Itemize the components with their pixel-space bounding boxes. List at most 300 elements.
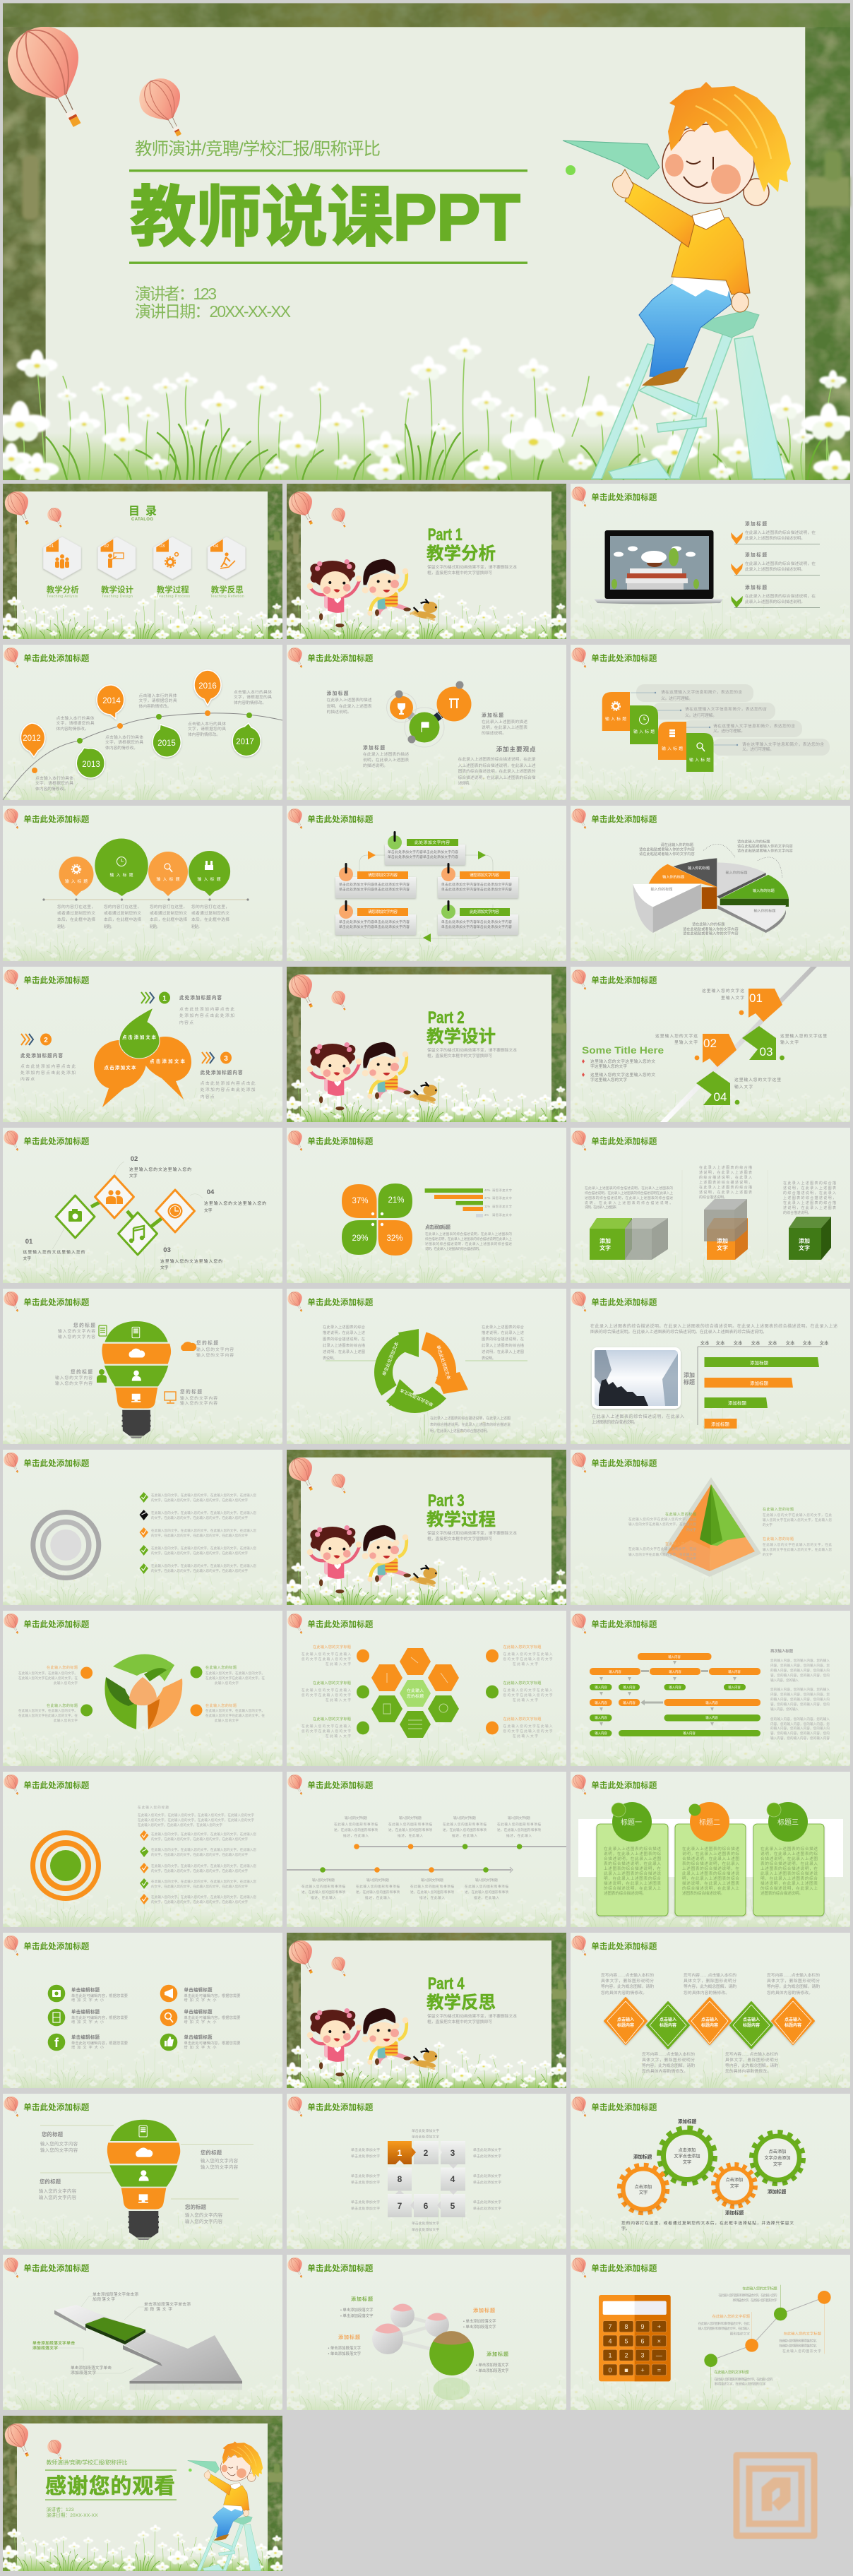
pill labels: 输入内容 bbox=[705, 1700, 718, 1705]
left labels: 的文字 bbox=[686, 1556, 696, 1561]
arrow 01 bbox=[748, 989, 782, 1022]
note 1 bbox=[141, 991, 234, 1025]
notes: 输入文字 bbox=[780, 1039, 799, 1045]
item: third point: 在此录入上述图表的综合描述说明，在 bbox=[745, 593, 816, 599]
pill labels: 输入内容 bbox=[683, 1731, 696, 1736]
text upper right: 输入您的文字内容 bbox=[201, 2157, 239, 2164]
right labels: 在此输入您的文字标题 bbox=[503, 1680, 541, 1686]
side icons bbox=[357, 1650, 499, 1734]
right labels: 在此输入您的文字在此输入 bbox=[503, 1652, 553, 1657]
left labels: 在此输入您的文字在此输入 bbox=[302, 1688, 351, 1693]
icon: calculator: 3 bbox=[640, 2352, 644, 2359]
text block middle: 述说明，在此录入上述图表 bbox=[699, 1170, 752, 1175]
axis labels: 文本 bbox=[820, 1340, 829, 1346]
captions: 粘贴。 bbox=[104, 924, 114, 929]
faded meadow bbox=[0, 914, 285, 962]
left labels: 在此输入文字 bbox=[326, 1698, 351, 1703]
left labels: 在此输入您的文字。在此输入您的文字。 bbox=[18, 1671, 78, 1676]
left labels: 输入您的文字在此输入您的文字，在此输入您 bbox=[628, 1522, 696, 1527]
pill text: 请在这里输入文字信息和简介，表达您的含 bbox=[685, 706, 767, 712]
connectors bbox=[359, 855, 493, 938]
background bbox=[287, 1611, 566, 1766]
puzzle tiles bbox=[388, 2141, 465, 2217]
lower timeline bbox=[287, 1867, 513, 1873]
note 3: 处添加内容点击此处添加 bbox=[201, 1087, 256, 1092]
puzzle tiles: 1 bbox=[398, 2148, 402, 2158]
tile notes: 单击此处添加文字 bbox=[473, 2206, 501, 2211]
text: right: 在此录入上述图表的描述 bbox=[482, 719, 527, 724]
right labels: 在此输入您的文字在此输入您的文字。在 bbox=[205, 1676, 265, 1681]
axis title bbox=[684, 1371, 695, 1385]
axis labels: 文本 bbox=[786, 1340, 795, 1346]
box dark green bbox=[789, 1217, 831, 1260]
heading: 单击此处添加标题 bbox=[591, 1297, 657, 1307]
text block left: 说明，在此录入上述图表的综合描述说明。 bbox=[585, 1200, 673, 1205]
panel: Part 1 section slide bbox=[282, 484, 568, 640]
card one: 明，在此录入上述图表的综合 bbox=[604, 1876, 661, 1881]
label 03: 这里输入您的文这里输入您的 bbox=[160, 1258, 222, 1264]
icon: big balloon bbox=[1, 2419, 38, 2462]
captions: 您的内容打在这里， bbox=[191, 904, 229, 910]
illustration: kids bbox=[307, 2008, 437, 2076]
faded meadow bbox=[282, 1880, 568, 1928]
text: upper left: 的描述说明。 bbox=[326, 709, 352, 715]
chart note: 说明，在此录入上述图表的综合描述说明。 bbox=[425, 1246, 482, 1251]
right text: 输入内容，您的输入 bbox=[770, 1707, 799, 1712]
petal 37% bbox=[342, 1184, 377, 1218]
background bbox=[3, 1128, 282, 1283]
left labels: 在此输入您的文字。在此输入您的文字。 bbox=[18, 1708, 78, 1713]
faded meadow bbox=[566, 2202, 852, 2250]
chart: 3d pie: 请在此粘贴或者输入你的文字内容 bbox=[737, 847, 793, 853]
icon: balloon bbox=[1, 1611, 24, 1637]
diagonal band bbox=[660, 967, 817, 1122]
faded meadow bbox=[0, 2202, 285, 2250]
heading: 单击此处添加标题 bbox=[591, 1619, 657, 1629]
item: analysis: 01 bbox=[49, 544, 54, 549]
card low right: 单击此处添加文字内容 bbox=[441, 924, 477, 929]
text blocks: 体内容酌情修改。 bbox=[35, 786, 68, 792]
illustration: kids bbox=[307, 1525, 437, 1593]
diamond labels: 标题内容 bbox=[743, 2022, 760, 2028]
text block left: 说明，在此录入上述图表 bbox=[585, 1205, 616, 1210]
flow arrows bbox=[600, 1661, 736, 1726]
icon: small balloon bbox=[329, 989, 351, 1013]
faded meadow bbox=[282, 1397, 568, 1445]
chart: growth line: 在此输入您的图形和事项描述文字，在此输入您的 bbox=[714, 2377, 773, 2382]
right text: 内容，您的输入内容，您的输入内容，您 bbox=[770, 1692, 830, 1697]
diamond labels: 标题内容 bbox=[701, 2022, 718, 2028]
chart: 3d pie: 输入你的标题 bbox=[688, 865, 710, 871]
text: lower right bbox=[180, 1388, 217, 1406]
upper captions: 在此输入您的图形和事项描 bbox=[443, 1822, 487, 1827]
background bbox=[571, 1611, 850, 1766]
photo caption: 上述图表的综合描述说明。 bbox=[592, 1419, 638, 1425]
card one bbox=[597, 1802, 668, 1916]
background bbox=[571, 2094, 850, 2249]
forest frame background bbox=[3, 3, 850, 480]
sub heading: CATALOG bbox=[131, 518, 153, 522]
pill labels: 输入内容 bbox=[595, 1731, 607, 1736]
panel: calculator slide bbox=[566, 2255, 852, 2411]
icon: balloon bbox=[569, 1933, 592, 1959]
arrow 04: 04 bbox=[714, 1090, 727, 1104]
label 02: 这里输入您的文这里输入您的 bbox=[129, 1167, 191, 1172]
tile notes: 单击此处添加文字 bbox=[412, 2134, 439, 2140]
tab 1 bbox=[602, 692, 630, 731]
bubble 2017: 2017 bbox=[236, 738, 254, 746]
icon: balloon bbox=[1, 1128, 24, 1154]
background bbox=[571, 1450, 850, 1605]
bubble 3: 输入标题 bbox=[157, 876, 180, 882]
box labels: 文字 bbox=[717, 1244, 728, 1251]
bubble 2015: 2015 bbox=[157, 739, 176, 748]
text blocks: 点击输入本行的具体 bbox=[105, 734, 143, 740]
heading: 单击此处添加标题 bbox=[307, 653, 374, 663]
divider lines bbox=[682, 1170, 768, 1262]
frame bbox=[287, 967, 566, 1122]
photo: business team bbox=[592, 1347, 681, 1409]
panel: laptop slide bbox=[566, 484, 852, 640]
leader lines bbox=[52, 1162, 203, 1258]
card top: 单击此处添加文字内容 bbox=[423, 849, 458, 854]
text: lower left bbox=[55, 1368, 93, 1386]
background bbox=[571, 1772, 850, 1927]
background bbox=[571, 1289, 850, 1444]
faded meadow bbox=[566, 1558, 852, 1606]
text: upper right: 输入您的文字内容 bbox=[196, 1352, 234, 1358]
chart: curve line bbox=[3, 713, 282, 800]
text lower right: 输入您的文字内容 bbox=[185, 2212, 223, 2218]
background bbox=[3, 967, 282, 1122]
card low right: 单击此处添加文字内容 bbox=[477, 919, 512, 924]
background bbox=[571, 484, 850, 639]
item: third point: 添加标题 bbox=[745, 584, 767, 590]
icon: balloon bbox=[285, 2094, 308, 2120]
tab 2 bbox=[630, 705, 658, 744]
axis labels bbox=[700, 1340, 829, 1346]
honeycomb bbox=[371, 1648, 459, 1738]
text left: 表说明。 bbox=[323, 1355, 337, 1361]
bar 2: 添加标题 bbox=[750, 1380, 768, 1386]
pill text: 请在这里输入文字信息和简介，表达您的含 bbox=[742, 741, 824, 747]
card one: 在此录入上述图表的综合描述 bbox=[604, 1846, 661, 1852]
tile notes: 单击此处添加文字 bbox=[473, 2200, 501, 2205]
captions: 或者通过复制您的文 bbox=[57, 910, 95, 916]
card low left bbox=[335, 900, 416, 935]
card mid right: 单击此处添加文字内容 bbox=[441, 882, 477, 887]
left labels bbox=[628, 1512, 696, 1561]
faded meadow bbox=[566, 2363, 852, 2411]
left labels: 您的文字在此输入您的文字 bbox=[302, 1657, 351, 1662]
icon: big balloon bbox=[285, 970, 322, 1013]
chart: 3d pie bbox=[633, 838, 793, 936]
text: lower left: 说明，在此录入上述图表 bbox=[363, 757, 409, 763]
left labels: 此输入您的文字 bbox=[54, 1681, 78, 1686]
card one: 描述说明，在此录入上述图表 bbox=[604, 1880, 661, 1886]
captions: 本后，在此框中选择 bbox=[57, 917, 95, 922]
left labels: 在此输入文字 bbox=[326, 1662, 351, 1666]
note 2: 单击添加段落文字单击添 bbox=[144, 2301, 191, 2307]
list text: 的文字。在此输入您的文字。在此输入您的文字。在此输入您的文字 bbox=[151, 1868, 248, 1873]
note 2 bbox=[20, 1034, 76, 1082]
heading: 单击此处添加标题 bbox=[591, 1136, 657, 1146]
label 01: 这里输入您的文这里输入您的 bbox=[23, 1249, 85, 1255]
gear orange two: 点击添加 bbox=[726, 2177, 743, 2183]
chart: cycle arrows: 单击此处添加文本 bbox=[381, 1340, 400, 1376]
text blocks: 体内容酌情修改。 bbox=[188, 732, 220, 737]
pill labels: 输入内容 bbox=[728, 1685, 741, 1690]
gear orange two bbox=[713, 2165, 756, 2206]
text blocks: 点击输入本行的具体 bbox=[56, 715, 95, 721]
text block right: 上述图表的综合描述说明， bbox=[783, 1195, 836, 1200]
background bbox=[3, 1611, 282, 1766]
item: second point bbox=[731, 551, 820, 576]
card one: 合描述说明，在此录入上述图 bbox=[604, 1856, 661, 1861]
presenter: 演讲者：123 bbox=[47, 2506, 74, 2512]
frame bbox=[3, 484, 282, 639]
note 4 bbox=[71, 2365, 112, 2375]
faded meadow bbox=[566, 1236, 852, 1284]
icon: large hot air balloon bbox=[0, 14, 109, 142]
puzzle tiles: 5 bbox=[451, 2201, 455, 2211]
sub heading: Some Title Here bbox=[582, 1044, 664, 1056]
text: upper left: 输入您的文字内容 bbox=[58, 1328, 95, 1334]
faded meadow bbox=[0, 1397, 285, 1445]
background bbox=[3, 1772, 282, 1927]
title orange 1: 添加标题 bbox=[473, 2307, 495, 2313]
chart: 3d pie: 请在此输入你的标题 bbox=[737, 838, 770, 844]
text block middle bbox=[699, 1165, 752, 1200]
petal 21% bbox=[378, 1183, 412, 1218]
text blocks: 文字，请根据您的具 bbox=[234, 694, 272, 700]
card mid right bbox=[438, 863, 518, 898]
connectors bbox=[91, 1202, 164, 1227]
tile notes: 单击此处添加文字 bbox=[412, 2221, 439, 2226]
section title: 教学分析 bbox=[426, 544, 496, 564]
item: search: 单击此处可编辑内容，根据您需要 bbox=[184, 2015, 240, 2020]
label 03: 文字 bbox=[160, 1265, 169, 1270]
text: upper right: 您的标题 bbox=[196, 1340, 218, 1346]
icon: small hot air balloon bbox=[132, 71, 198, 145]
bullet list: 字这里输入您的文字 bbox=[590, 1063, 627, 1069]
text right bbox=[482, 1324, 525, 1361]
item: reflection: Teaching Refletion bbox=[210, 595, 244, 599]
note 1: 内容点 bbox=[179, 1020, 193, 1025]
text right: 表说明。 bbox=[482, 1355, 496, 1361]
list text: 在此输入您的文字。在此输入您的文字。在此输入您的文字。在此输入您 bbox=[151, 1510, 256, 1515]
text: lower right: 输入您的文字内容 bbox=[180, 1395, 217, 1401]
bullets: • 单击添加段落文字 bbox=[340, 2307, 374, 2313]
diamond music bbox=[119, 1212, 157, 1255]
panel: diamonds slide bbox=[0, 1128, 285, 1284]
note 3: 此处添加标题内容 bbox=[201, 1069, 243, 1075]
icon: balloon bbox=[569, 1772, 592, 1798]
right labels: 在此输入您的文字标题 bbox=[503, 1644, 541, 1650]
right text: 您的输入内容，您的输入内容，您的输入 bbox=[770, 1717, 830, 1722]
right text: 内容，您的输入内容，您的输入内容，您 bbox=[770, 1663, 830, 1668]
background bbox=[287, 645, 566, 800]
panel: Part 2 section slide bbox=[282, 967, 568, 1123]
intro bbox=[138, 1805, 254, 1827]
tab 1: 输入标题 bbox=[605, 716, 626, 722]
bubble 2012 bbox=[20, 723, 45, 757]
heading: 单击此处添加标题 bbox=[591, 814, 657, 824]
text left: 描述说明，在此录入上述 bbox=[323, 1330, 365, 1335]
note 1: 此处添加标题内容 bbox=[179, 994, 222, 1001]
text upper left: 输入您的文字内容 bbox=[40, 2147, 78, 2153]
item: first point: 添加标题 bbox=[745, 520, 767, 527]
label 03 bbox=[160, 1246, 222, 1270]
text blocks: 文字，请根据您的具 bbox=[138, 698, 177, 703]
panel: grey rings slide bbox=[0, 1450, 285, 1606]
background bbox=[3, 1933, 282, 2088]
left labels: 在此输入您的文字在此输入您的文字。在 bbox=[18, 1713, 78, 1718]
icon: note bbox=[99, 1325, 107, 1336]
panel: double timeline slide bbox=[282, 1772, 568, 1928]
text blocks: 体内容酌情修改。 bbox=[234, 700, 266, 705]
axis labels: 文本 bbox=[768, 1340, 777, 1346]
text: main idea: 在此录入上述图表的综合描述说明，在此录 bbox=[458, 756, 536, 762]
icon: calculator: 0 bbox=[608, 2366, 612, 2373]
note 3: 点击此处添加内容点击此 bbox=[201, 1080, 256, 1086]
card top: 单击此处添加文字内容 bbox=[388, 849, 423, 854]
notes: 这里输入您的文字这 bbox=[702, 988, 744, 994]
intro: 在此输入您的文字。在此输入您的文字。在此输入您的文字。在此输入您的文字 bbox=[138, 1818, 254, 1823]
card three: 明，在此录入上述图表的综合 bbox=[760, 1876, 818, 1881]
bullets: • 单击添加段落文字 bbox=[340, 2313, 374, 2319]
box labels: 添加 bbox=[717, 1237, 728, 1244]
panel: puzzle slide bbox=[282, 2094, 568, 2250]
icon: balloon bbox=[569, 1289, 592, 1315]
right labels: 在此输入文字 bbox=[513, 1698, 538, 1703]
bubble 2013 bbox=[76, 748, 105, 778]
text: right: 的描述说明。 bbox=[482, 730, 506, 736]
section title: 教学设计 bbox=[426, 1027, 496, 1046]
bubble 4: 输入标题 bbox=[198, 876, 221, 882]
item: thumbs up: 单击编辑标题 bbox=[184, 2034, 213, 2040]
note 1: 点击此处添加内容点击此 bbox=[179, 1006, 234, 1012]
petal 21%: 21% bbox=[388, 1196, 405, 1205]
description: 框，直接把文本框中的文字替换即可 bbox=[427, 1053, 492, 1059]
pill text: 义。进行可理解。 bbox=[742, 746, 774, 752]
gear orange two: 文字 bbox=[730, 2183, 739, 2189]
faded meadow bbox=[566, 914, 852, 962]
icon: small balloon bbox=[329, 506, 351, 530]
faded meadow bbox=[282, 1236, 568, 1284]
item: third point bbox=[731, 584, 820, 608]
bullets bbox=[328, 2307, 509, 2373]
card one: 此录入上述图表的综合描述说 bbox=[604, 1871, 661, 1876]
item: search: 增加文字大小 bbox=[184, 2019, 217, 2025]
panel: target rings slide bbox=[0, 1772, 285, 1928]
pill labels: 输入内容 bbox=[623, 1700, 636, 1705]
note 1: 单击添加段落文字单击添 bbox=[93, 2291, 138, 2297]
tile notes: 单击此处添加文字 bbox=[351, 2154, 380, 2159]
upper captions: 描述，在此输入 bbox=[506, 1833, 532, 1838]
icon: balloon bbox=[1, 1933, 24, 1959]
chart: cycle arrows: 单击此处添加文本 bbox=[398, 1387, 434, 1408]
diamond labels: 标题内容 bbox=[617, 2022, 634, 2028]
faded meadow bbox=[566, 2041, 852, 2089]
petal 32%: 32% bbox=[386, 1234, 403, 1243]
faded meadow bbox=[282, 753, 568, 801]
card one: 表的综合描述说明，在此录入 bbox=[604, 1861, 661, 1866]
note 3: 内容点 bbox=[201, 1094, 215, 1099]
bullet list: 字这里输入您的文字 bbox=[590, 1077, 627, 1083]
background bbox=[3, 645, 282, 800]
upper captions: 描述，在此输入 bbox=[343, 1833, 369, 1838]
card three: 此录入上述图表的综合描述说 bbox=[760, 1871, 818, 1876]
icon: big balloon bbox=[285, 1936, 322, 1979]
illustration: boy on ladder bbox=[563, 82, 791, 479]
icon: monitor bbox=[165, 1392, 176, 1403]
right labels: 在此输入您的标题 bbox=[205, 1703, 237, 1708]
icon: balloon bbox=[569, 1128, 592, 1154]
icon: small balloon bbox=[329, 1955, 351, 1979]
arrows bbox=[368, 851, 486, 942]
tile notes: 单击此处添加文字 bbox=[412, 2128, 439, 2133]
bar chart bbox=[425, 1188, 512, 1217]
right labels: 此输入您的文字 bbox=[215, 1718, 239, 1723]
faded meadow bbox=[0, 1880, 285, 1928]
list text: 的文字。在此输入您的文字。在此输入您的文字。在此输入您的文字 bbox=[151, 1837, 248, 1842]
list text: 的文字。在此输入您的文字。在此输入您的文字。在此输入您的文字 bbox=[151, 1568, 248, 1573]
background bbox=[3, 806, 282, 961]
heading: 单击此处添加标题 bbox=[591, 2102, 657, 2112]
item: process bbox=[153, 537, 191, 599]
chart: growth line: 事项描述文字，在此输入您的图形文字 bbox=[714, 2382, 766, 2387]
right labels: 在此输入您的文字在此输入您的文字。在 bbox=[205, 1713, 265, 1718]
card mid left: 单击此处添加文字内容 bbox=[339, 887, 374, 892]
icon: balloon bbox=[569, 1611, 592, 1637]
diamonds bbox=[604, 1998, 814, 2049]
bar 1 bbox=[705, 1357, 819, 1367]
gear green one: 点击添加 bbox=[679, 2147, 696, 2153]
label 01: 文字 bbox=[23, 1256, 31, 1261]
panel: molecule balls slide bbox=[282, 2255, 568, 2411]
bullet icons bbox=[140, 1492, 148, 1574]
card two: 的综合描述说明，在此录入上 bbox=[682, 1885, 739, 1891]
bullet list bbox=[582, 1059, 655, 1083]
icon: balloon bbox=[569, 484, 592, 510]
panel: Part 3 section slide bbox=[282, 1450, 568, 1606]
item: first point bbox=[731, 520, 820, 544]
tab 2: 输入标题 bbox=[633, 729, 655, 734]
card two: 描述说明，在此录入上述图表 bbox=[682, 1880, 739, 1886]
bar chart: 3% bbox=[484, 1213, 489, 1217]
leader lines bbox=[32, 2296, 144, 2373]
heading: 单击此处添加标题 bbox=[591, 492, 657, 502]
tab 4 bbox=[686, 733, 713, 772]
left labels: 在此输入您的标题 bbox=[47, 1703, 78, 1708]
item: process: 03 bbox=[160, 544, 165, 549]
heading: 单击此处添加标题 bbox=[591, 2263, 657, 2273]
icon: balloon bbox=[569, 806, 592, 832]
upper captions: 输入您的文字标题 bbox=[345, 1815, 367, 1820]
item: analysis bbox=[43, 537, 81, 599]
panel: arrows 01-04 slide bbox=[566, 967, 852, 1123]
text left: 述说明，在此录入上述图 bbox=[323, 1349, 365, 1354]
background bbox=[287, 806, 566, 961]
heading: 单击此处添加标题 bbox=[307, 1780, 374, 1790]
icon: calculator: 1 bbox=[608, 2352, 612, 2359]
bubble 2016 bbox=[194, 670, 221, 705]
bubble labels: 点击添加文本 bbox=[105, 1064, 136, 1071]
axis labels: 文本 bbox=[803, 1340, 812, 1346]
bubble 3 bbox=[148, 852, 188, 896]
faded meadow bbox=[0, 1558, 285, 1606]
